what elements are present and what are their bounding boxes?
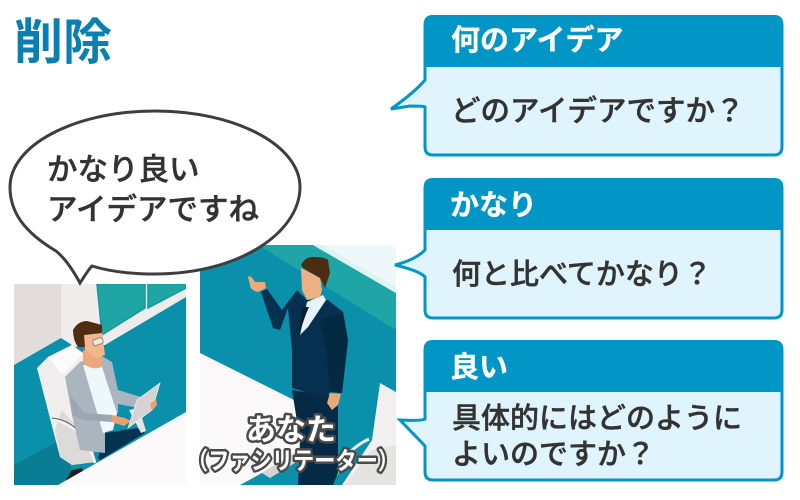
cuff and hand: [248, 276, 266, 292]
comment text: アイデアですね: [47, 193, 259, 227]
hair: [73, 321, 102, 347]
question card: 良い: [400, 340, 783, 480]
question card: 何のアイデア: 何のアイデア: [451, 23, 624, 57]
table: [58, 412, 186, 485]
chair: [37, 345, 95, 465]
chair: [342, 383, 396, 485]
caption: you (facilitator): （ファシリテーター）: [187, 448, 399, 475]
question card: 何のアイデア: どのアイデアですか？: [451, 95, 745, 128]
right hand: [327, 393, 341, 410]
question card: 何のアイデア: [391, 15, 783, 155]
tie: [298, 307, 309, 337]
caption: you (facilitator): あなた: [246, 414, 336, 447]
comment text: かなり良い: [47, 153, 200, 187]
far sleeve and jacket: [261, 289, 348, 398]
face: [83, 331, 105, 358]
tablet: [128, 383, 160, 428]
neck and face: [301, 268, 322, 300]
trousers: [98, 428, 145, 460]
illustration: seated man with tablet: [14, 284, 186, 485]
question card: 良い: 具体的にはどのように: [452, 402, 742, 435]
illustration: standing facilitator: [200, 245, 396, 485]
neck: [83, 350, 102, 368]
caption: you (facilitator): [187, 414, 399, 475]
hand on tablet: [112, 415, 131, 426]
sleeve far arm: [118, 390, 141, 408]
speech bubble: comment: [10, 111, 300, 283]
shirt: [300, 295, 326, 335]
question card: 良い: 良い: [450, 351, 508, 384]
shirt: [83, 365, 117, 433]
question card: かなり: [395, 178, 783, 318]
glasses: [92, 337, 104, 346]
question card: かなり: かなり: [450, 190, 537, 222]
legs: [292, 390, 338, 485]
title: 削除: [14, 16, 112, 70]
jacket near sleeve: [70, 395, 112, 422]
hair: [301, 257, 330, 288]
far hand: [150, 399, 157, 411]
comment text: [47, 153, 259, 227]
question card: かなり: 何と比べてかなり？: [452, 258, 712, 291]
jacket: [65, 355, 118, 453]
question card: 良い: よいのですか？: [452, 439, 655, 471]
chair support: [129, 408, 146, 433]
